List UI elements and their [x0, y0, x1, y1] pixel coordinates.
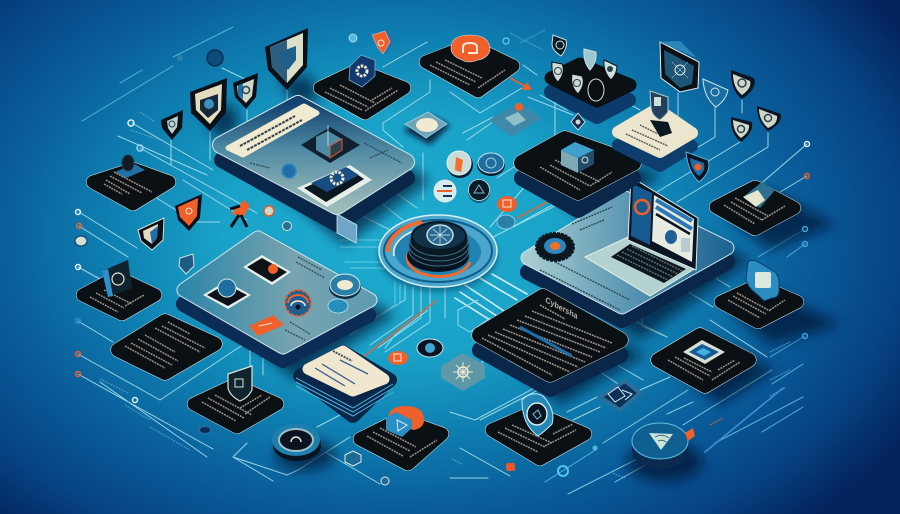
icon: transfer badge [433, 179, 457, 203]
icon: wireframe cube on dark tile [301, 125, 360, 163]
card: left lock card [93, 155, 169, 204]
panel: top-left analysis panel [221, 104, 407, 224]
card: beige status card [618, 91, 692, 166]
laptop [585, 177, 698, 296]
icon: diamond badge [600, 381, 640, 410]
panel: laptop panel [528, 177, 727, 320]
card: big text card [480, 295, 620, 389]
icon: orange shield left [175, 194, 202, 231]
panel: lower-left tools panel [184, 238, 370, 360]
icon: shield orange core [686, 152, 709, 182]
circuit lines [78, 27, 807, 494]
icon: shield pin [522, 394, 553, 436]
icon: top-right framed panel [660, 41, 699, 92]
faux text lines [250, 143, 402, 168]
faux text [430, 60, 505, 88]
faux text [367, 428, 437, 457]
icon: file tile [337, 214, 357, 243]
beige heading label [228, 106, 317, 155]
faux text [724, 198, 785, 224]
icon: figure badge [447, 151, 473, 178]
icon: orange shield top [372, 29, 394, 54]
icon: low shield badge center-left [179, 254, 194, 274]
icon: chip [683, 340, 725, 364]
icon: shield medium right [233, 73, 258, 109]
blue outlined capsule line [705, 388, 783, 452]
faux text [315, 360, 368, 386]
icon: orange file badge [497, 196, 517, 212]
card: play badge card [360, 406, 442, 464]
card: shield pin card [492, 394, 585, 459]
icon: network badge [468, 180, 490, 203]
icon: small orange ring coin [264, 206, 274, 216]
icon: speech bubble [746, 260, 779, 301]
icon: wifi disc [632, 423, 695, 469]
faux text [728, 293, 785, 318]
faux text [482, 305, 612, 375]
faux text [202, 395, 270, 421]
icon: refresh badge [477, 153, 505, 176]
icon: dark shield left low [138, 218, 164, 250]
faux text [498, 424, 576, 452]
icon: small pin [381, 477, 389, 485]
icon: map tile [492, 103, 538, 134]
icon: orange tile [249, 315, 284, 336]
faux text [540, 160, 612, 190]
card: top-right shield cluster [551, 35, 630, 117]
faux text lines [285, 257, 325, 340]
hub dial [427, 225, 453, 245]
icon: round cloud badge [329, 274, 361, 299]
panel shadows [200, 75, 840, 482]
icon: small shield e [572, 74, 583, 94]
icon: small drop node [571, 113, 585, 130]
icon: oval badge [588, 79, 604, 101]
card: save bubble card [721, 260, 797, 322]
icon: large shield [265, 28, 308, 90]
card: lower shield card [194, 366, 277, 427]
icon: small shield b [584, 49, 596, 70]
icon: orange chat badge [388, 351, 408, 365]
icon: device [743, 182, 775, 208]
icon: blue shield right a [703, 79, 728, 107]
orange connector lines [363, 78, 547, 357]
icon: gear screen tile [297, 165, 372, 207]
icon: gear hexagon [349, 55, 375, 87]
icon: dark framed tile left [203, 279, 251, 309]
icon: small shield a [552, 35, 566, 56]
blue highlight bar [520, 327, 572, 356]
icon: cloud tile [403, 112, 450, 145]
card: top orange badge card [426, 35, 513, 91]
card: top gear card [320, 55, 404, 113]
icon: small shield c [604, 60, 617, 80]
central hub [378, 215, 498, 292]
icon: small shield d [552, 62, 563, 82]
icon: open box [561, 142, 594, 173]
faux text lines [540, 207, 630, 310]
icon: blue tablet [102, 260, 132, 297]
icon: shield medium left [190, 78, 227, 131]
icon: hex sun [441, 353, 485, 391]
card: large left text card [118, 321, 215, 373]
icon: endpoint nodes [76, 34, 810, 476]
icon: blue badge [282, 164, 296, 178]
icon: orange ring and blue hex [386, 406, 424, 437]
icon: shield on stand [650, 91, 672, 137]
icon: small hex badge [345, 451, 361, 466]
faux text [104, 172, 152, 194]
icon: dark shield right c [731, 117, 752, 142]
icon: shield [228, 366, 252, 401]
faux text [90, 290, 144, 312]
icon: orange at badge [451, 35, 490, 62]
icon: gear badge [536, 233, 574, 261]
faux text [668, 357, 740, 380]
icon: small round badge [328, 299, 348, 313]
icon: dark shield right b [731, 70, 755, 99]
card: right device card [716, 182, 794, 229]
icon: orange figure [230, 200, 250, 227]
icon: gauge badge [497, 215, 515, 229]
icon: lock on blue plate [115, 155, 145, 178]
icon: shield small left [161, 110, 183, 140]
card: bottom stacked beige card [296, 351, 393, 416]
icon: left round small marker [75, 236, 87, 246]
icon: small round node [282, 222, 292, 230]
card: lower-left icon card [83, 260, 155, 314]
icon: round lock disc [272, 424, 321, 461]
icon: dark shield right d [757, 106, 781, 131]
faux text [125, 322, 205, 368]
icon: wifi gear [285, 290, 311, 316]
icon: dark node badge [417, 339, 443, 357]
card: center server card [522, 139, 633, 210]
faint caption lines [100, 30, 790, 478]
card: chip card [658, 335, 749, 386]
faux text [626, 125, 668, 150]
round badges around hub [388, 151, 517, 365]
faux text [325, 85, 398, 111]
callout: orange and cloud tiles [272, 103, 695, 485]
card heading: Cybersha [545, 295, 579, 321]
icon: dark framed tile top [243, 255, 291, 285]
